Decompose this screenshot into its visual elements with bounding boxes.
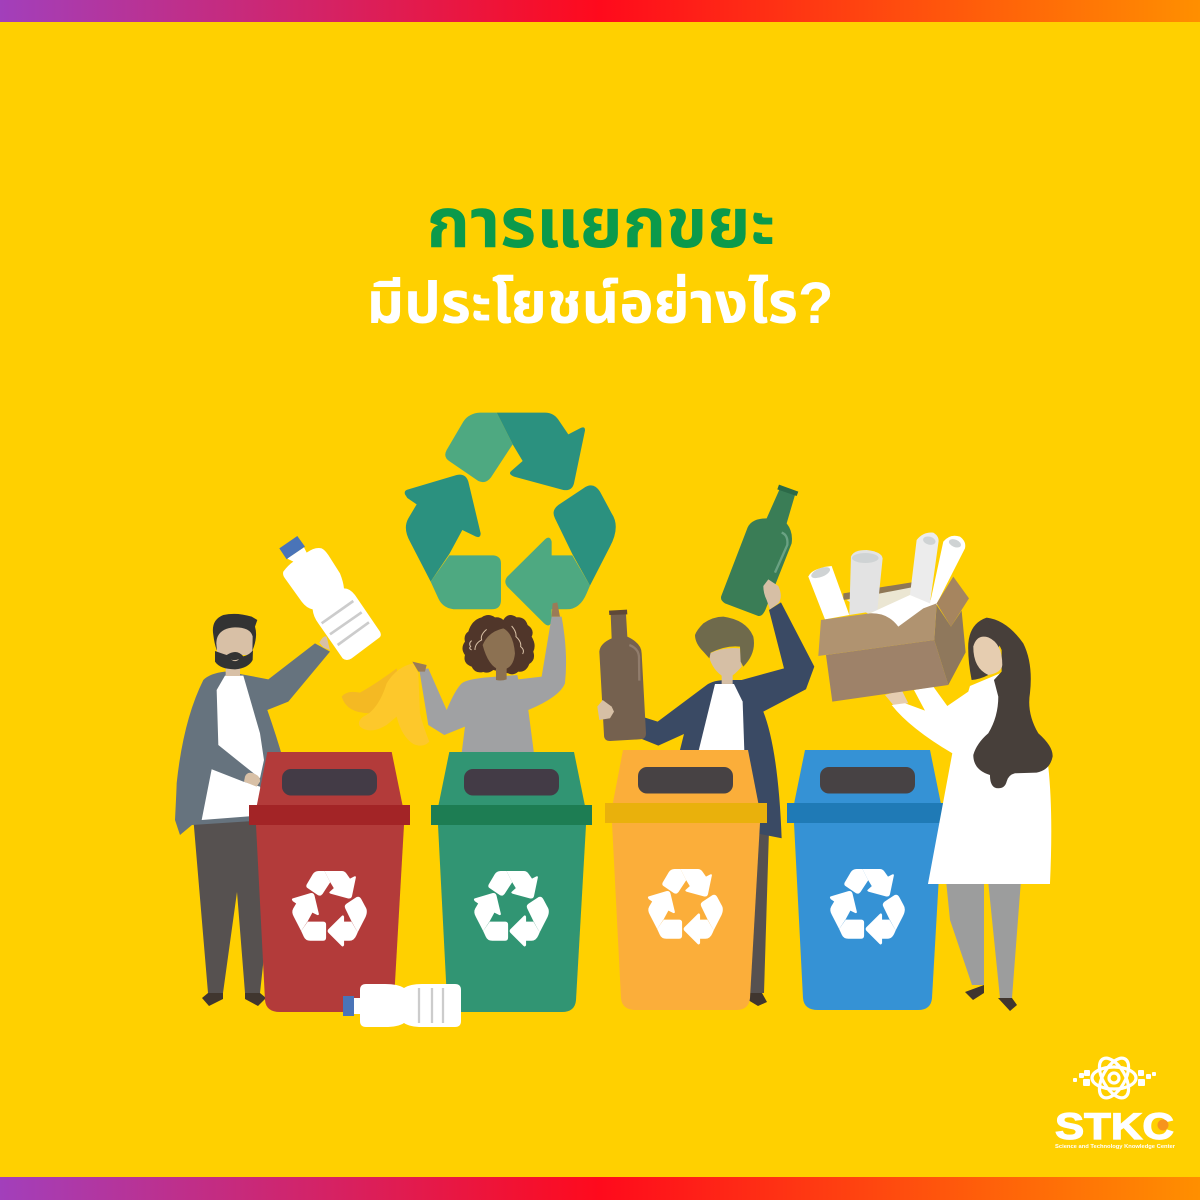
raised hand (319, 636, 330, 650)
long hair (973, 618, 1053, 788)
box front (826, 640, 948, 702)
person: man in navy jacket (640, 602, 814, 1006)
top gradient bar (0, 0, 1200, 22)
trousers (193, 812, 270, 993)
hand holding peel (412, 662, 427, 672)
paper roll 4 (930, 536, 965, 604)
mouth (231, 659, 239, 661)
legs (946, 880, 1021, 998)
face (710, 648, 742, 678)
shirt (202, 676, 267, 820)
icon: green glass bottle (721, 485, 798, 616)
white dress (892, 673, 1051, 884)
neck (226, 668, 240, 676)
back sleeve shadow (1027, 710, 1037, 733)
hair (213, 614, 257, 650)
person: man with beard holding plastic bottle (175, 614, 330, 1006)
paper roll 1 (808, 566, 849, 619)
logo: STKC (1055, 1053, 1176, 1150)
neck (496, 668, 507, 681)
hand under box (885, 690, 908, 705)
front flap (818, 603, 937, 656)
shoes (202, 993, 266, 1006)
hair on the left of the face (968, 618, 1002, 680)
title line 1: การแยกขยะ (427, 184, 775, 262)
icon: brown glass bottle (597, 610, 646, 741)
navy jacket (640, 602, 814, 838)
bin: blue (787, 750, 943, 1010)
logo dot (1158, 1120, 1168, 1130)
logo tagline: Science and Technology Knowledge Center (1055, 1144, 1176, 1150)
shoe (748, 993, 767, 1006)
atom emblem (1092, 1053, 1136, 1103)
trouser leg (750, 830, 769, 993)
bin: red (249, 752, 410, 1012)
neck (722, 675, 733, 684)
bin: orange (605, 750, 767, 1010)
paper sheet (870, 595, 938, 628)
face (483, 628, 515, 670)
icon: plastic bottle held up (279, 536, 381, 660)
grey top and arms (419, 617, 566, 753)
raised hand (552, 602, 560, 617)
hand at waist (244, 773, 260, 787)
paper roll 3 (910, 533, 939, 603)
title line 2: มีประโยชน์อย่างไร? (367, 271, 833, 336)
shoes (965, 985, 1017, 1011)
icon: plastic bottle on floor (343, 984, 461, 1027)
icon: banana peel (342, 663, 429, 746)
person: woman with curly hair (412, 602, 566, 753)
bottom gradient bar (0, 1177, 1200, 1200)
side flap (937, 577, 969, 627)
beard (215, 650, 253, 669)
face (216, 627, 253, 655)
shirt (699, 684, 744, 751)
icon: cardboard box with paper rolls (808, 533, 969, 702)
back flap (843, 582, 912, 600)
icon: large recycle symbol (405, 413, 616, 625)
box inside (847, 587, 937, 615)
curly hair (462, 615, 535, 674)
box side (934, 605, 966, 685)
paper roll 2 (849, 550, 883, 615)
emblem dots (1073, 1070, 1156, 1086)
hair highlights (470, 626, 523, 654)
bin: green (431, 752, 592, 1012)
cardigan (175, 643, 330, 835)
face (973, 637, 1002, 675)
hair (695, 617, 754, 667)
person: woman with long hair in white dress (885, 618, 1053, 1011)
logo wordmark: STKC (1055, 1106, 1174, 1147)
